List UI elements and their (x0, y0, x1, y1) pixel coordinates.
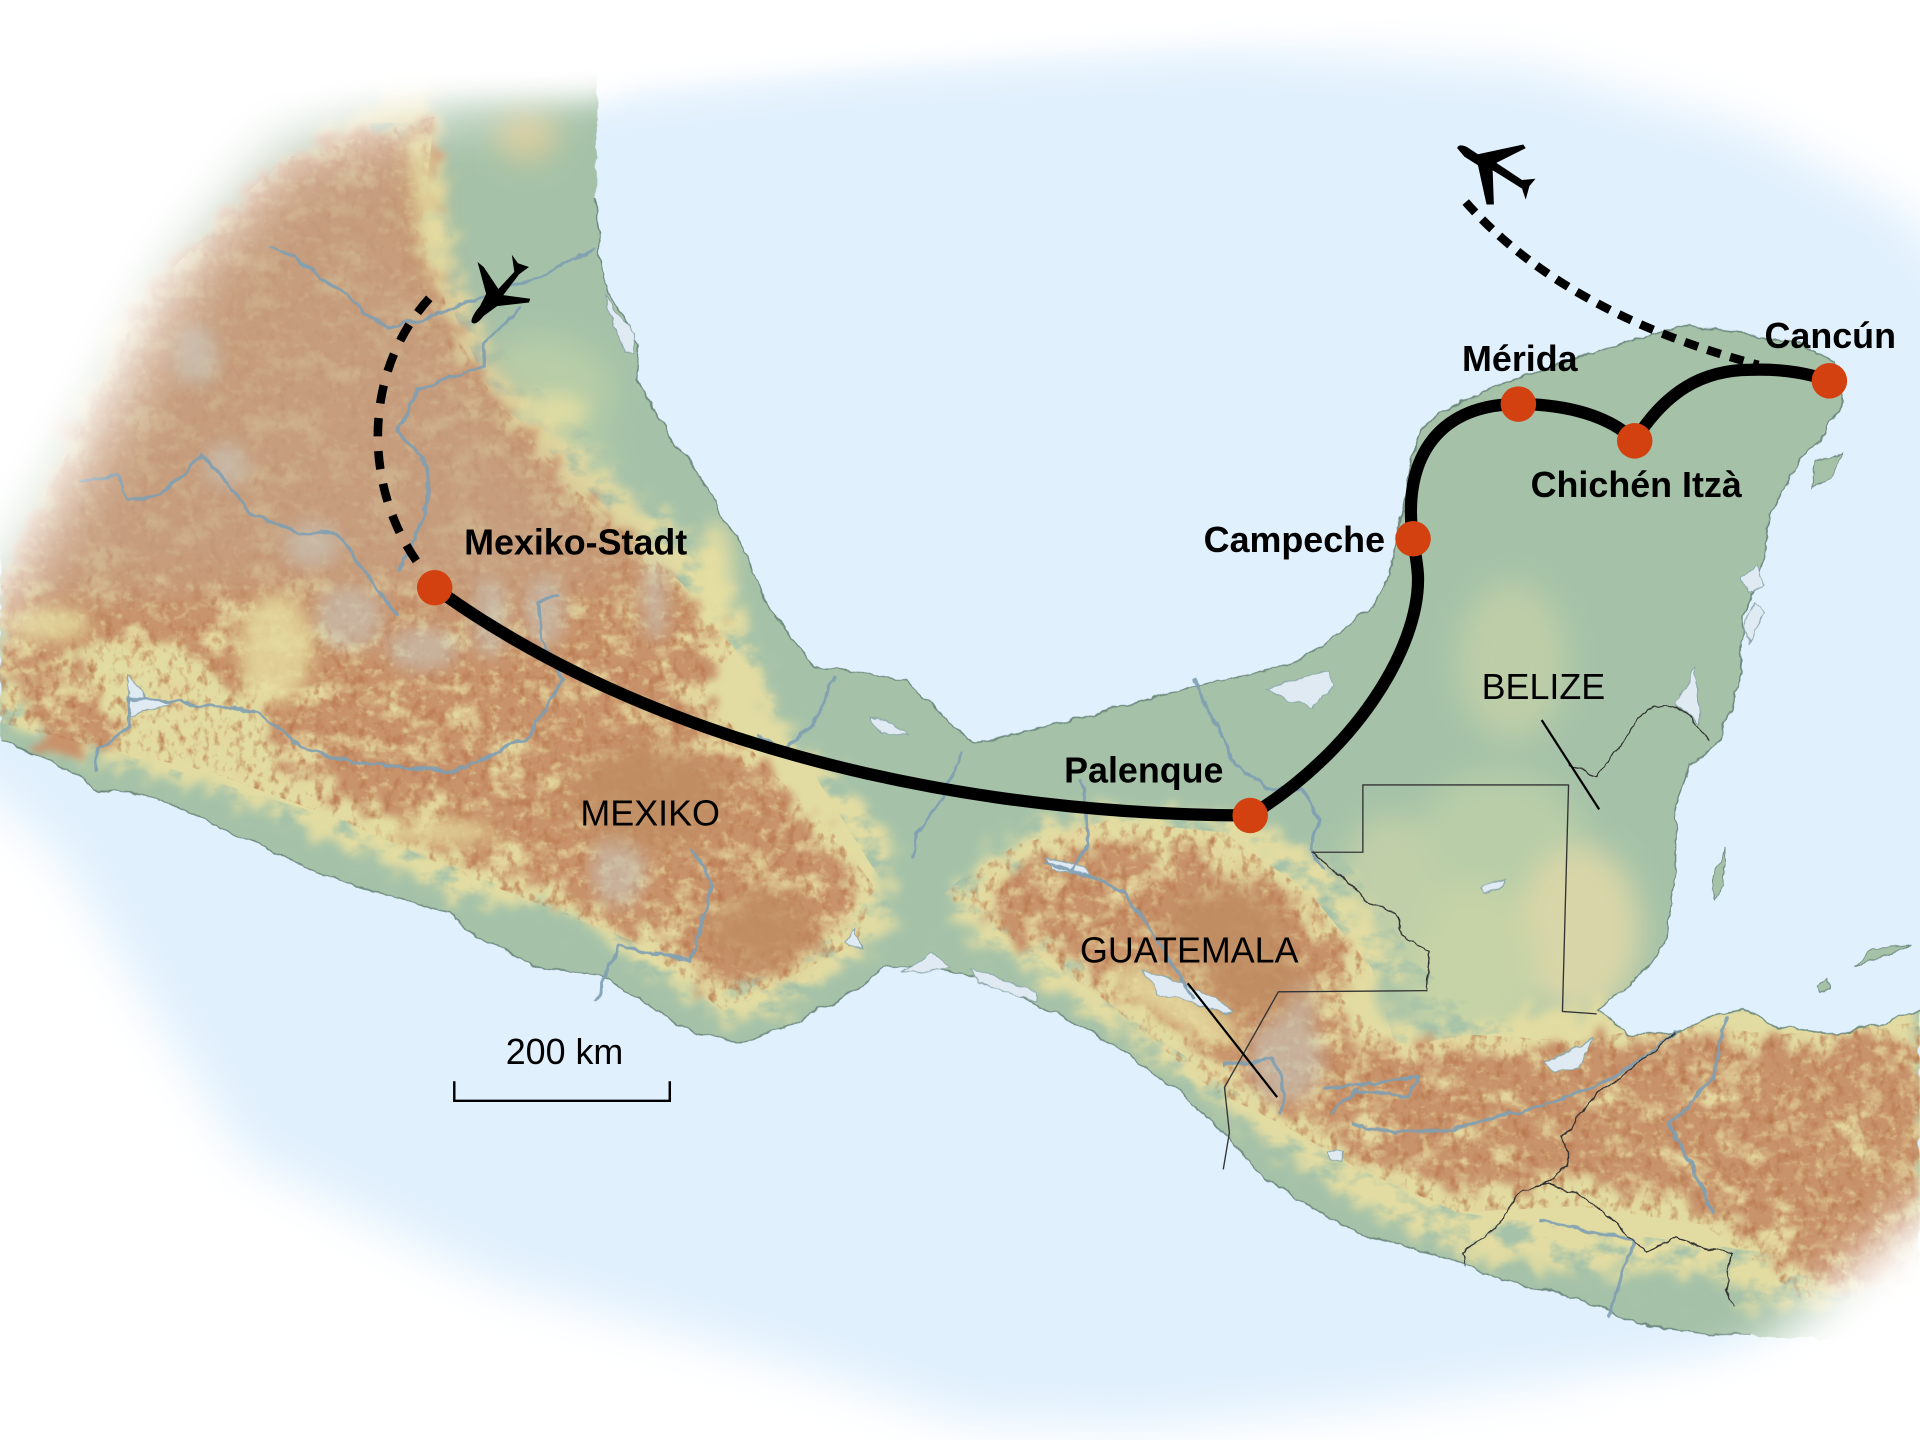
label: Mexiko-Stadt: Mexiko-Stadt (464, 523, 687, 563)
stop: Mexiko-Stadt (417, 570, 452, 606)
solid route (435, 370, 1829, 816)
pale lowland patches (486, 104, 1654, 1036)
label: GUATEMALA: GUATEMALA (1080, 930, 1299, 970)
high plateau grey (174, 324, 1322, 1102)
stop: Campeche (1395, 521, 1431, 557)
green breakup of foothill band (0, 122, 1850, 1306)
dashed flight path: departure (1466, 202, 1758, 365)
label: Chichén Itzà: Chichén Itzà (1531, 465, 1743, 505)
label: MEXIKO: MEXIKO (580, 793, 720, 833)
scale bar (454, 1032, 670, 1101)
straight country borders (1223, 785, 1597, 1169)
icon: plane departure (1457, 144, 1536, 204)
scale bar: 200 km (506, 1032, 623, 1072)
leader line: Guatemala (1188, 983, 1277, 1097)
stop: Palenque (1232, 798, 1268, 833)
stop: Mérida (1501, 386, 1536, 422)
coastline (0, 198, 1920, 1335)
label: Campeche: Campeche (1204, 520, 1385, 560)
muted northern plateau (0, 129, 649, 606)
icon: plane arrival (471, 255, 530, 324)
label: BELIZE: BELIZE (1482, 667, 1605, 707)
country borders (1311, 708, 1736, 1308)
dashed flight path: arrival (378, 294, 433, 561)
label: Mérida: Mérida (1462, 339, 1579, 379)
stop: Cancún (1812, 363, 1847, 399)
label: Cancún: Cancún (1764, 316, 1896, 356)
rivers (80, 249, 1725, 1316)
dark central Guatemala and Oaxaca plateau (576, 747, 1310, 1010)
stop: Chichén Itzà (1617, 423, 1652, 459)
label: Palenque: Palenque (1064, 750, 1224, 790)
lakes and islands (129, 294, 1911, 1161)
leader line: Belize (1542, 720, 1599, 809)
yellow bands on the west (7, 121, 1249, 1058)
